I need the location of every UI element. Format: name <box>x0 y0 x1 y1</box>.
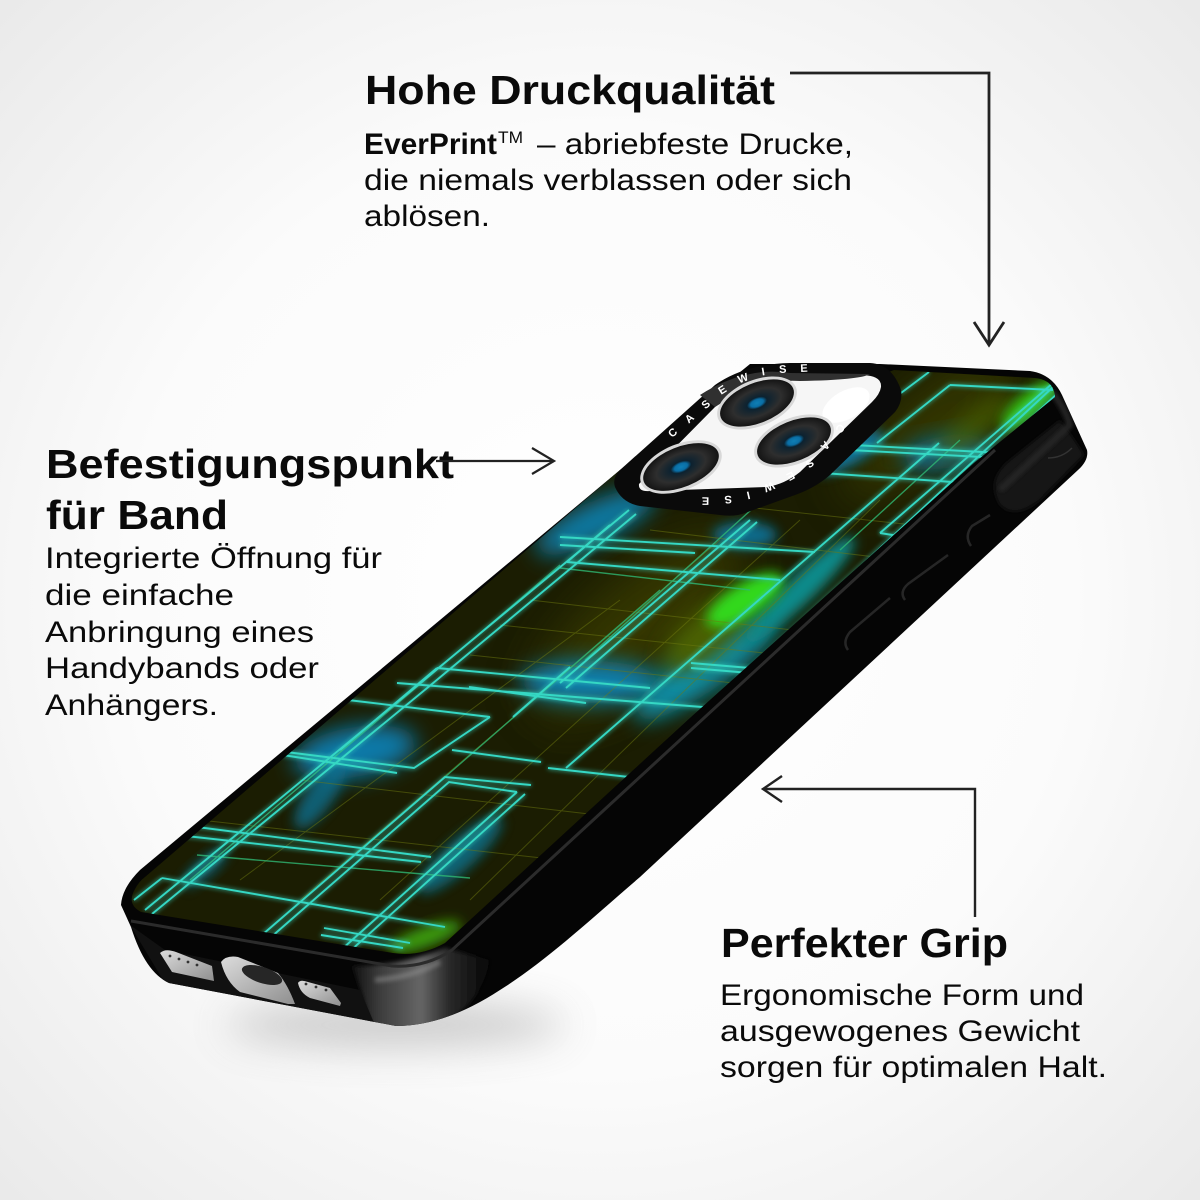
description <box>45 542 382 722</box>
heading: Perfekter Grip <box>721 920 1008 966</box>
description <box>364 128 853 233</box>
lens right <box>746 404 842 478</box>
arrow: to case side <box>763 776 975 917</box>
phone case illustration <box>121 363 1088 1026</box>
camera glass <box>639 375 881 491</box>
description: TM <box>498 128 523 147</box>
description: Anhängers. <box>45 689 218 722</box>
ring lettering top: CASEWISE <box>668 364 808 436</box>
heading: Hohe Druckqualität <box>365 67 775 113</box>
heading <box>46 441 454 538</box>
printed back panel <box>132 370 1055 954</box>
description: Handybands oder <box>45 652 319 685</box>
description <box>720 979 1107 1084</box>
heading: für Band <box>46 492 228 538</box>
description: Anbringung eines <box>45 616 314 649</box>
thin green lines <box>190 440 960 880</box>
arrow: down to case top <box>790 73 1004 345</box>
phone drop shadow <box>225 1003 565 1047</box>
callout: Perfekter Grip <box>720 920 1107 1084</box>
camera ring <box>614 363 901 516</box>
camera island <box>614 363 902 516</box>
lens left <box>633 430 729 504</box>
bottom ports <box>160 950 341 1006</box>
description: Ergonomische Form und <box>720 979 1084 1012</box>
arrow: to camera strap point <box>436 448 554 474</box>
neon cyan lines <box>134 372 1058 952</box>
heading: Befestigungspunkt <box>46 441 454 487</box>
glossy bottom corner <box>130 392 1084 1030</box>
left speaker <box>160 950 214 981</box>
description: die niemals verblassen oder sich <box>364 164 852 197</box>
callout: Hohe Druckqualität <box>364 67 853 233</box>
ring lettering bottom: CASEWISE <box>702 425 844 505</box>
description: Integrierte Öffnung für <box>45 542 382 575</box>
description: EverPrint <box>364 128 497 161</box>
callout: Befestigungspunkt für Band <box>45 441 454 722</box>
right speaker <box>298 981 341 1006</box>
lens top <box>709 366 805 440</box>
colour glows <box>178 327 1066 959</box>
side buttons <box>845 515 990 650</box>
description: sorgen für optimalen Halt. <box>720 1051 1107 1084</box>
case body <box>121 364 1087 1026</box>
description: – abriebfeste Drucke, <box>537 128 853 161</box>
description: die einfache <box>45 579 234 612</box>
description: ablösen. <box>364 200 490 233</box>
description: ausgewogenes Gewicht <box>720 1015 1081 1048</box>
thin olive grid <box>210 500 906 900</box>
charging port <box>221 957 295 1004</box>
